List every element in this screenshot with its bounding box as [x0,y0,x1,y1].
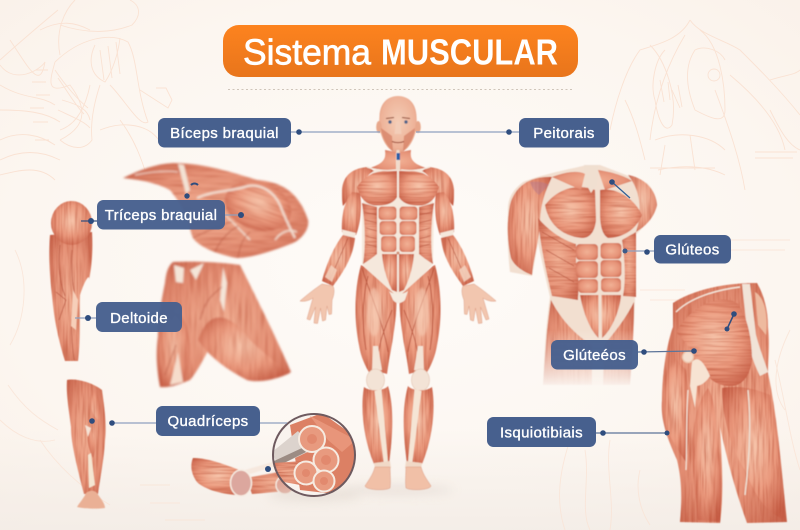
figure: gluteal and leg back view [662,283,787,523]
title badge: MUSCULAR [381,32,558,72]
quadriceps highlight [367,288,381,336]
abdominal row 1 [378,206,396,220]
collar tendon [367,167,430,171]
sacrum [755,292,767,335]
title badge: Sistema [243,32,372,72]
lens tissue [290,415,354,493]
deltoid [218,173,298,239]
label: Glúteéos: Glúteéos [563,347,626,364]
tendon line [745,390,750,495]
connector: deltoid [75,315,96,321]
spine tendon [742,284,768,376]
right pectoral [600,190,642,238]
forearm and upper arm [49,232,92,361]
background sketch: faint notes [140,290,685,520]
figure: muscle bundle [191,458,300,496]
serratus left [538,218,578,300]
head and neck [370,96,426,172]
figure: full body front view [300,96,496,495]
figure: torso front detail [508,165,657,385]
label: Bíceps braquial: Bíceps braquial [170,125,279,142]
deltoid ball [51,201,92,245]
lower abdominal [382,254,397,292]
label: Peitorais [519,118,609,148]
label: Isquiotibiais: Isquiotibiais [500,424,583,442]
bundle main [191,458,245,495]
neck [584,165,594,194]
foot [77,491,105,509]
bundle white tendon [245,459,285,474]
label: Peitorais: Peitorais [533,125,595,142]
label: Glúteos: Glúteos [665,242,720,258]
lateral tendon [226,216,297,240]
outer thigh muscle [662,358,689,462]
abdominal blocks [576,243,622,293]
elbow detail [56,245,76,360]
thigh [355,265,397,377]
patellar tendon [372,346,382,372]
calf [67,379,106,494]
figure: upper back and deltoid detail [123,163,308,258]
shin tendon [374,389,388,465]
background sketch: top-right anatomy [610,20,800,190]
serratus right [622,232,636,297]
forearm [322,235,355,286]
calf muscle [87,390,100,458]
background sketch: top-left anatomy [0,0,172,180]
knee [366,369,384,391]
cut end large [230,470,252,496]
upper tendon [676,287,740,312]
lower back muscle [193,222,250,258]
hand [300,284,334,324]
right deltoid [628,175,657,232]
label: Deltoide [96,302,182,332]
upper arm muscles [158,313,190,386]
ankle band [374,461,391,469]
label: Quadríceps: Quadríceps [167,413,249,430]
biceps [342,192,361,235]
foot [365,467,390,490]
long head muscle [198,317,290,381]
connector: quadriceps [89,418,287,472]
left pectoral [545,187,596,238]
torso backing [362,170,434,304]
connector: isquiotibiais [596,430,670,436]
lens orange bundle [272,461,306,486]
deltoid purple sheen [530,182,549,195]
thigh remains [543,300,634,385]
back muscle mass [123,163,308,258]
label: Glúteos [654,235,731,264]
torso backing [508,165,657,385]
magnifier lens [268,413,360,501]
abdominal row 2 [380,221,396,235]
cream hip tendon [690,359,710,408]
label: Quadríceps [156,406,260,436]
label: Bíceps braquial [158,118,291,148]
secondary bundle [246,470,300,494]
connector: biceps [291,129,380,135]
connector: torso shoulder [609,179,630,198]
left deltoid and arm [508,177,552,275]
gluteus [676,300,752,386]
figure: arm back view [49,201,92,361]
tendon [88,453,95,488]
tendons [174,263,227,312]
connector: triceps [81,184,244,224]
title badge [223,25,578,77]
lower leg [362,386,392,464]
label: Isquiotibiais [487,417,596,447]
label: Deltoide: Deltoide [110,310,168,327]
rear leg outline [662,283,787,523]
pectoral [357,171,397,206]
abdominal row 3 [381,236,396,252]
neck marker [396,153,400,160]
lens fibre cross-sections [294,426,338,492]
hamstring [692,388,721,522]
tendon strip [71,290,78,330]
label: Tríceps braquial [97,200,225,230]
connector: glúteos [622,248,654,255]
connector: pectorals [416,129,519,135]
lower abdominal [580,295,621,338]
right half of body [399,167,496,490]
upper left trap fibres [135,171,178,175]
lens grey bundle [274,431,308,462]
crotch cream [389,291,408,303]
neck tendon [178,164,190,194]
floor shadow [343,485,453,495]
label: Glúteéos [551,340,638,370]
rear hamstring [722,387,785,520]
figure: shoulder and arm muscles [157,262,291,387]
cut end small [276,476,294,494]
label: Tríceps braquial: Tríceps braquial [105,207,217,224]
figure: lower leg back view [67,379,106,509]
background sketch: lower-right anatomy [0,240,800,530]
left half of body [300,167,397,490]
hip landmark [682,352,694,362]
deltoid [342,167,374,206]
navel [396,252,400,254]
elbow tendon [342,230,356,238]
oblique [362,203,377,264]
connector: glúteéos [638,311,737,355]
shoulder tendon [197,186,295,238]
